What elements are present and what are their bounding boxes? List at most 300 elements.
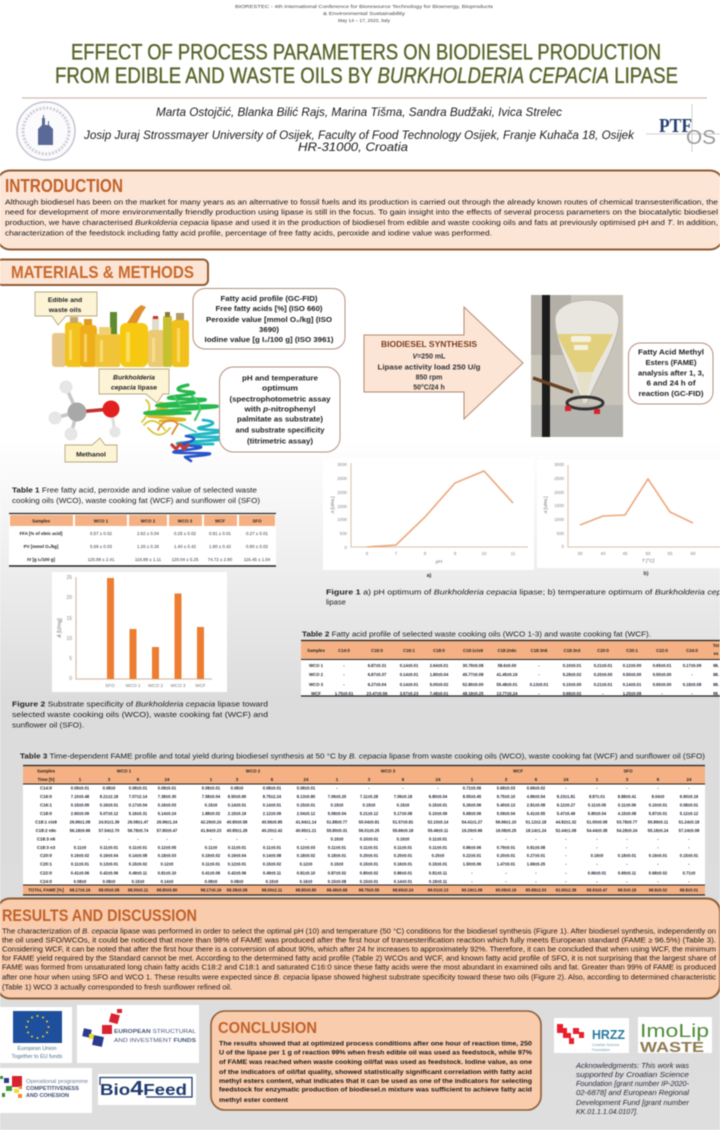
table 1: 120.04 ± 5.25 bbox=[172, 557, 199, 562]
table 3: 53.78±0.77 bbox=[617, 820, 638, 824]
text block: conclusion: methyl ester content bbox=[219, 1097, 289, 1104]
table 3: 0.15±0.01 bbox=[360, 879, 379, 884]
table 3: 0.69±0.11 bbox=[618, 870, 637, 876]
table 3: - bbox=[505, 836, 507, 842]
table 3: 0.68±0.02 bbox=[649, 870, 668, 876]
table 3: 41.84±0.23 bbox=[201, 828, 222, 833]
text block: results: (Table 1) WCO 3 actually corresponded to fresh sunflower refined oil. bbox=[2, 982, 232, 991]
table 2: 23.47±0.56 bbox=[367, 691, 388, 696]
table 3: 0.08±0.01 bbox=[680, 802, 699, 808]
table 2: - bbox=[343, 663, 345, 668]
table 1: SFO bbox=[252, 518, 262, 524]
heading: conclusion: CONCLUSION bbox=[218, 1020, 317, 1037]
table 3: 0.16±0.03 bbox=[158, 802, 177, 808]
table 2: C16:0 bbox=[371, 648, 383, 653]
table 2: 48.18±0.25 bbox=[463, 691, 484, 696]
table 2: 0.13±0.01 bbox=[530, 682, 549, 687]
box: pH and temperature assays: (spectrophotometric assay bbox=[230, 396, 331, 404]
table 3: 51.12±2.18 bbox=[526, 820, 547, 824]
icon: PTF OS logo: PTF bbox=[659, 115, 692, 137]
table 3: 5.08±0.04 bbox=[328, 811, 347, 816]
table 2: - bbox=[538, 691, 540, 696]
table 2: C18:3n3 bbox=[564, 648, 581, 653]
table 3: C18:2 n6c bbox=[36, 828, 57, 833]
table 3: WCO 1 bbox=[117, 768, 132, 774]
table 3: 2.04±0.12 bbox=[297, 811, 316, 816]
text block: results: after one hour when using SFO and WCO 1. These results were expected since B. cepacia lipase showed highest substrate specificity toward these two oils (Figure 2). Also, according to determined characteristic bbox=[2, 972, 716, 981]
table 2: Samples bbox=[307, 648, 325, 653]
chart: figure 1a pH optimum line: 1000 bbox=[337, 517, 348, 522]
table 1: WCO 1 bbox=[94, 518, 109, 524]
table 2: WCF bbox=[311, 691, 321, 696]
chart: figure 1a pH optimum line: A [U/mL] bbox=[330, 496, 335, 515]
table 3: 0.14±0.01 bbox=[263, 802, 282, 808]
table 3: - bbox=[657, 845, 659, 850]
box: pH and temperature assays: palmitate as substrate) bbox=[237, 416, 323, 424]
table 3: 0.08±0 bbox=[103, 786, 116, 790]
table 3: TOTAL FAME [%] bbox=[28, 888, 64, 892]
table 2: - bbox=[343, 672, 345, 677]
box: FAME analysis: analysis after 1, 3, bbox=[638, 370, 704, 378]
table 2: 41.45±0.19 bbox=[497, 672, 518, 677]
table 3: 0.19±0.02 bbox=[71, 853, 90, 858]
table 3: - bbox=[236, 836, 238, 842]
conference header bbox=[235, 4, 494, 23]
chart: figure 2 substrate specificity bars: 0 bbox=[69, 676, 72, 682]
table 3: 56.78±0.74 bbox=[128, 828, 149, 833]
table 3: 8.75±2.24 bbox=[263, 794, 282, 799]
text block: results: the oil used SFO/WCOs, it could be noticed that more than 98% of FAME was produced after the first hour of transesterification reaction which fully meets European standard (FAME ≥ 96.5%) (Table 3). bbox=[2, 935, 716, 944]
table 3: 55.18±0.24 bbox=[648, 828, 669, 833]
table 3: 98.8±0.01 bbox=[680, 888, 699, 892]
callout: methanol: Methanol bbox=[76, 452, 106, 458]
table 2: 6.87±0.37 bbox=[368, 672, 387, 677]
acknowledgments: Acknowledgments: This work was bbox=[575, 1061, 689, 1070]
table 3: 8.88±0.41 bbox=[618, 794, 637, 799]
text block: conclusion: The results showed that at optimized process conditions after one hour of reaction time, 250 bbox=[219, 1040, 532, 1048]
table 3: 1 bbox=[79, 777, 82, 782]
chart: figure 1b temperature optimum line: 55 bbox=[667, 551, 673, 556]
acknowledgments: Foundation [grant number IP-2020- bbox=[576, 1079, 690, 1088]
table 1: 116.88 ± 1.11 bbox=[135, 557, 162, 562]
logo: HRZZ bbox=[554, 1018, 629, 1053]
table 3: 0.14±0.08 bbox=[263, 853, 282, 858]
table 1: FFA [% of oleic acid] bbox=[20, 531, 63, 536]
table 2: C18:1cis9 bbox=[463, 648, 484, 653]
table 3: 7.07±2.14 bbox=[129, 794, 148, 799]
chart: figure 2 substrate specificity bars bbox=[52, 572, 227, 692]
chart: figure 2 substrate specificity bars: 15 bbox=[66, 616, 72, 622]
table 3: 98.80±0.80 bbox=[296, 888, 317, 892]
table 2: 7.48±0.01 bbox=[430, 691, 449, 696]
table 3: 5.41±0.55 bbox=[527, 811, 546, 816]
table 3: 98.00±2.11 bbox=[262, 888, 283, 892]
table 3: 0.15±0.01 bbox=[360, 862, 379, 866]
chart: figure 1b temperature optimum line: 2000 bbox=[554, 490, 565, 495]
logo: Operational programme competitiveness and cohesion: Operational programme bbox=[26, 1079, 88, 1085]
table 1: 74.72 ± 2.80 bbox=[208, 557, 233, 562]
table 3: 0.15±0 bbox=[266, 879, 279, 884]
text block: results: for FAME yield required by the Standard cannot be met. According to the determined fatty acid profile (Table 2) WCOs and WCF, and known fatty acid profile of SFO, it is not surprising that the largest share of bbox=[2, 953, 717, 962]
table 3: 0.86±0.06 bbox=[463, 845, 482, 850]
table 3: 1.88±0.02 bbox=[202, 811, 221, 816]
table 3: 0.11±0.01 bbox=[263, 845, 282, 850]
table 2: 13.77±0.24 bbox=[497, 691, 518, 696]
table 3: - bbox=[305, 836, 307, 842]
table 1: WCF bbox=[215, 518, 225, 524]
table 1 caption: Table 1 Free fatty acid, peroxide and iodine value of selected waste bbox=[12, 486, 257, 494]
chart: figure 1a pH optimum line: pH bbox=[435, 559, 443, 565]
table 3: 98.75±0.55 bbox=[359, 888, 380, 892]
table 2: 0.10±0.01 bbox=[563, 663, 582, 668]
table 3: 0.11±0.01 bbox=[360, 845, 379, 850]
table 3: 99.01±0.13 bbox=[428, 888, 449, 892]
acknowledgments: Development Fund [grant number bbox=[576, 1098, 690, 1107]
table 2: 30.79±0.08 bbox=[463, 663, 484, 668]
logo: ImoLip WASTE bbox=[638, 1017, 712, 1056]
table 2: 5.00±0.02 bbox=[430, 682, 449, 687]
text block: conclusion: methyl esters content, what indicates that it can be used as one of the indicators for selecting bbox=[219, 1078, 532, 1085]
table 2: C14:0 bbox=[338, 648, 350, 653]
table 3: - bbox=[596, 879, 598, 884]
table 2: 52.80±0.00 bbox=[463, 682, 484, 687]
table 3: 0.11±0.01 bbox=[328, 845, 347, 850]
table 3: 0.14±0.01 bbox=[394, 879, 413, 884]
table 3: 0.19±0.01 bbox=[649, 853, 668, 858]
box: feedstock analyses: 3690) bbox=[259, 327, 279, 334]
text block: conclusion: U of the lipase per 1 g of reaction 99% when fresh edible oil was used as feedstock, while 97% bbox=[219, 1050, 532, 1056]
conference header: BIORESTEC - 4th International Conference for Bioresource Technology for Bioenergy, Bioproducts bbox=[235, 4, 494, 9]
table 2: 0.10±0.00 bbox=[563, 682, 582, 687]
table 3: 98.17±0.19 bbox=[201, 888, 222, 892]
table 2: C18:3n6 bbox=[531, 648, 548, 653]
table 2: 0.21±0.01 bbox=[594, 663, 613, 668]
table 1: WCO 2 bbox=[141, 518, 156, 524]
table 3: 24 bbox=[564, 777, 569, 782]
table 2: - bbox=[538, 672, 540, 677]
table 2: 2.64±0.01 bbox=[430, 663, 449, 668]
table 3: - bbox=[535, 870, 537, 876]
box: feedstock analyses bbox=[193, 288, 345, 349]
chart: figure 1a pH optimum line: 11 bbox=[511, 551, 516, 556]
table 3: Samples bbox=[37, 768, 56, 774]
table 3: 0.87±0.02 bbox=[328, 870, 347, 876]
table 3: - bbox=[437, 786, 439, 790]
heading: results and discussion: RESULTS AND DISCUSSION bbox=[2, 906, 197, 925]
chart: figure 1a pH optimum line: 9 bbox=[454, 551, 457, 556]
table 3: 8.55±0.45 bbox=[463, 794, 482, 799]
table 3: 0.15±0.08 bbox=[328, 879, 347, 884]
table 3: - bbox=[626, 845, 628, 850]
table 3: 54.44±0.38 bbox=[587, 828, 608, 833]
chart: figure 2 substrate specificity bars: WCO 2 bbox=[148, 683, 163, 688]
table 3: 0.08±0.01 bbox=[297, 786, 316, 790]
table 3: 5.21±0.12 bbox=[360, 811, 379, 816]
table 3: 0.15±0.02 bbox=[129, 862, 148, 866]
table 3: 0.19±0 bbox=[591, 853, 604, 858]
chart: figure 1a pH optimum line: 7 bbox=[395, 551, 398, 556]
chart: figure 1b temperature optimum line: A [U/mL] bbox=[543, 496, 548, 515]
panel: results and discussion bbox=[0, 898, 720, 998]
bars bbox=[107, 578, 204, 679]
table 3: 24 bbox=[165, 777, 170, 782]
table 3: 5.10±0.09 bbox=[429, 811, 448, 816]
table 2: WCO 3 bbox=[309, 682, 324, 687]
table 3: 7.10±0.48 bbox=[71, 794, 90, 799]
table 3: - bbox=[596, 862, 598, 866]
table 3: 0.20±0.01 bbox=[360, 853, 379, 858]
table 2: 0.60±0.00 bbox=[653, 682, 672, 687]
table 3: 98.00±0.08 bbox=[99, 888, 120, 892]
table 3: 0.11±0.06 bbox=[618, 802, 637, 808]
table 3: 0.11±0.01 bbox=[71, 862, 90, 866]
table 3: 0.15±0.01 bbox=[680, 853, 699, 858]
table 3: - bbox=[688, 879, 690, 884]
authors: Marta Ostojčić, Blanka Bilić Rajs, Marina Tišma, Sandra Budžaki, Ivica Strelec bbox=[156, 105, 562, 119]
table 3: WCO 3 bbox=[381, 768, 396, 774]
table 2: 1.75±0.51 bbox=[335, 691, 354, 696]
table 3: - bbox=[535, 879, 537, 884]
table 3: 0.16±0 bbox=[300, 879, 313, 884]
table 3: 54.41±1.27 bbox=[462, 820, 483, 824]
table 2: C16:1 bbox=[403, 648, 415, 653]
chart: figure 1a pH optimum line: 10 bbox=[481, 551, 487, 556]
table 3: 0.20±0 bbox=[432, 853, 445, 858]
table 2: - bbox=[538, 663, 540, 668]
table 3: 5.47±0.49 bbox=[557, 811, 576, 816]
table 3: - bbox=[471, 879, 473, 884]
chart: figure 1b temperature optimum line: 1000 bbox=[554, 517, 565, 522]
table 2: 98. bbox=[713, 672, 719, 677]
table 2: 98. bbox=[713, 691, 719, 696]
table 3: 0.41±0.06 bbox=[71, 870, 90, 876]
table 3: 8.50±0.90 bbox=[228, 794, 247, 799]
figure 1 caption: lipase bbox=[326, 598, 346, 606]
table 3: 0.79±0.01 bbox=[497, 845, 516, 850]
table 3: - bbox=[108, 836, 110, 842]
box: feedstock analyses: Peroxide value [mmol O₂/kg] (ISO bbox=[206, 317, 333, 324]
table 3: 85.88±2.03 bbox=[526, 888, 547, 892]
table 2: 0.18±0.08 bbox=[683, 682, 702, 687]
table 3: C20:1 bbox=[40, 862, 53, 866]
table 3: 0.12±0.05 bbox=[158, 845, 177, 850]
box: pH and temperature assays: (titrimetric assay) bbox=[247, 438, 313, 446]
title: FROM EDIBLE AND WASTE OILS BY BURKHOLDERIA CEPACIA LIPASE bbox=[55, 63, 678, 88]
table 3: 24.91±1.39 bbox=[99, 820, 120, 824]
table 3: 98.8±0.02 bbox=[649, 888, 668, 892]
table 2: 0.20±0.00 bbox=[594, 672, 613, 677]
chart: figure 1b temperature optimum line: 2500 bbox=[554, 476, 565, 481]
table 3: 98.38±0.08 bbox=[227, 888, 248, 892]
table 3: 51.24±0.18 bbox=[679, 820, 700, 824]
table 3: 51.88±0.77 bbox=[327, 820, 348, 824]
table 3: 0.14±0 bbox=[161, 879, 174, 884]
table 3: C18:1 cis9 bbox=[35, 820, 57, 824]
table 3: 0.19±0.04 bbox=[228, 853, 247, 858]
table 3: 0.66±0.01 bbox=[588, 870, 607, 876]
table 3: 5.17±0.08 bbox=[394, 811, 413, 816]
table 3: 0.49±0.11 bbox=[263, 870, 282, 876]
table 3: 0.08±0.01 bbox=[263, 786, 282, 790]
table 3: 98.00±0.11 bbox=[128, 888, 149, 892]
table 1: 0.57 ± 0.02 bbox=[90, 531, 113, 536]
table 3: - bbox=[657, 879, 659, 884]
table 3: 1.47±0.01 bbox=[497, 862, 516, 866]
logo: Operational programme competitiveness and cohesion: COMPETITIVENESS bbox=[26, 1086, 80, 1092]
table 2: C20:1 bbox=[626, 648, 638, 653]
table 3: 50.04±0.81 bbox=[359, 820, 380, 824]
table 3: 5.07±0.12 bbox=[100, 811, 119, 816]
image: oil bottles bbox=[52, 305, 189, 367]
table 3: 1 bbox=[471, 777, 474, 782]
table 3: 56.66±1.10 bbox=[496, 820, 517, 824]
table 3: 0.13±0.01 bbox=[100, 862, 119, 866]
table 2: 6.27±0.04 bbox=[368, 682, 387, 687]
table 3: - bbox=[565, 862, 567, 866]
panel: conclusion bbox=[211, 1011, 541, 1110]
table 3: 5.09±0.04 bbox=[497, 811, 516, 816]
text block: conclusion: feedstock for enzymatic production of biodiesel.n mixture was sufficient to achieve fatty acid bbox=[219, 1086, 532, 1094]
table 3: 0.15±0 bbox=[331, 862, 344, 866]
text block: introduction: need for development of more environmentally friendly production using lipase is still in the focus. To gain insight into the effects of several process parameters on the biocatalytic biodiesel bbox=[5, 208, 718, 216]
table 3: - bbox=[505, 879, 507, 884]
table 3: 0.18±0.02 bbox=[297, 853, 316, 858]
table 3: 0.12±0.03 bbox=[297, 845, 316, 850]
chart: figure 1b temperature optimum line: 3000 bbox=[554, 462, 565, 467]
table 3 bbox=[23, 765, 705, 896]
table 3: 52.44±1.08 bbox=[556, 828, 577, 833]
table 2 bbox=[301, 640, 720, 696]
chart: figure 1a pH optimum line: 2500 bbox=[337, 476, 348, 481]
acknowledgments: KK.01.1.1.04.0107]. bbox=[576, 1107, 638, 1116]
table 3: 51.57±0.81 bbox=[393, 820, 414, 824]
table 2: - bbox=[602, 691, 604, 696]
table 3: 0.08±0 bbox=[231, 786, 244, 790]
table 2: 0.50±0.00 bbox=[653, 672, 672, 677]
table 1: IV [g I₂/100 g] bbox=[27, 557, 55, 562]
table 3: - bbox=[657, 786, 659, 790]
table 3: 0.81±0.08 bbox=[527, 845, 546, 850]
table 3: 0.27±0.01 bbox=[527, 853, 546, 858]
table 3: 50.89±0.11 bbox=[648, 820, 669, 824]
logo: European Structural and Investment Funds: EUROPEAN STRUCTURAL bbox=[114, 1029, 197, 1035]
table 3: 6.90±0.19 bbox=[680, 794, 699, 799]
arrow: biodiesel synthesis bbox=[364, 307, 523, 419]
table 3: - bbox=[336, 786, 338, 790]
table 3: 0.15±0 bbox=[331, 802, 344, 808]
table 3: 0.10±0.01 bbox=[360, 836, 379, 842]
table 3: 55.46±0.11 bbox=[428, 828, 449, 833]
table 3: - bbox=[688, 845, 690, 850]
table 3: 6.80±0.04 bbox=[429, 794, 448, 799]
table 1: WCO 3 bbox=[178, 518, 193, 524]
table 3: 0.69±0.02 bbox=[527, 786, 546, 790]
table 3: - bbox=[626, 862, 628, 866]
table 3: 8.23±1.81 bbox=[557, 794, 576, 799]
chart: figure 2 substrate specificity bars: WCO 1 bbox=[125, 683, 141, 688]
table 3: 0.49±0.11 bbox=[129, 870, 148, 876]
logo: HRZZ: Croatian Science bbox=[592, 1043, 619, 1047]
chart: figure 1a pH optimum line: 2000 bbox=[337, 490, 348, 495]
table 3: 7.06±0.18 bbox=[394, 794, 413, 799]
callout: Burkholderia cepacia lipase: Burkholderia bbox=[113, 374, 155, 382]
table 2: - bbox=[343, 682, 345, 687]
table 1: PV [mmol O₂/kg] bbox=[24, 544, 59, 549]
table 3: 92.65±2.38 bbox=[556, 888, 577, 892]
logo: Operational programme competitiveness and cohesion: AND COHESION bbox=[26, 1093, 69, 1099]
chart: figure 2 substrate specificity bars: 20 bbox=[66, 595, 72, 601]
logo: ImoLip WASTE: WASTE bbox=[640, 1039, 704, 1056]
table 3: 55.66±0.18 bbox=[393, 828, 414, 833]
table 3: 0.86±0.01 bbox=[394, 870, 413, 876]
table 3: - bbox=[271, 836, 273, 842]
table 1: 0.27 ± 0.01 bbox=[246, 531, 269, 536]
chart: figure 1a pH optimum line: 500 bbox=[340, 531, 348, 536]
table 3: - bbox=[471, 870, 473, 876]
chart: figure 1b temperature optimum line: 50 bbox=[645, 551, 651, 556]
table 3: 5.68±0.06 bbox=[463, 811, 482, 816]
table 3: 0.11±0.01 bbox=[228, 845, 247, 850]
table 3: 0.09±0.01 bbox=[71, 786, 90, 790]
table 3: 5.26±0.06 bbox=[463, 802, 482, 808]
table 3: 0.08±0.01 bbox=[202, 786, 221, 790]
table 3: 90.08±0.19 bbox=[496, 888, 517, 892]
table 3: SFO bbox=[623, 768, 633, 774]
table 3: 6 bbox=[402, 777, 405, 782]
table 3: C24:0 bbox=[40, 879, 53, 884]
table 3: 0.42±0.06 bbox=[228, 870, 247, 876]
table 3: 0.81±0.10 bbox=[297, 870, 316, 876]
arrow: biodiesel synthesis: 850 rpm bbox=[416, 374, 442, 382]
table 3: 42.29±0.24 bbox=[201, 820, 222, 824]
table 3: 40.95±1.21 bbox=[296, 828, 317, 833]
arrow: biodiesel synthesis: BIODIESEL SYNTHESIS bbox=[381, 339, 477, 349]
chart: figure 1b temperature optimum line: 500 bbox=[557, 531, 565, 536]
table 3: 0.08±0.01 bbox=[158, 786, 177, 790]
table 3: 0.11±0.01 bbox=[394, 845, 413, 850]
table 3: 57.54±2.70 bbox=[99, 828, 120, 833]
box: FAME analysis: Esters (FAME) bbox=[646, 360, 696, 367]
acknowledgments: 02-6878] and European Regional bbox=[576, 1088, 689, 1097]
table 3: - bbox=[626, 786, 628, 790]
acknowledgments bbox=[575, 1061, 690, 1116]
table 3: - bbox=[368, 786, 370, 790]
table 3: - bbox=[596, 845, 598, 850]
table 2: 1.80±0.04 bbox=[430, 672, 449, 677]
table 1: 116.45 ± 1.04 bbox=[244, 557, 271, 562]
arrow: biodiesel synthesis: V=250 mL bbox=[413, 354, 446, 360]
icon: methanol molecule bbox=[48, 380, 120, 440]
table 2: 0.65±0.01 bbox=[653, 663, 672, 668]
table 3: 0.11±0.01 bbox=[429, 836, 448, 842]
table 3: 6 bbox=[137, 777, 140, 782]
table 2: 58.6±0.00 bbox=[498, 663, 517, 668]
table 3: 0.15±0.09 bbox=[71, 802, 90, 808]
table 2: 0.21±0.01 bbox=[594, 682, 613, 687]
affiliation bbox=[83, 128, 635, 154]
table 3: 1 bbox=[210, 777, 213, 782]
table 3: - bbox=[166, 836, 168, 842]
table 3: WCO 2 bbox=[246, 768, 261, 774]
table 3: 0.15±0 bbox=[397, 802, 410, 808]
table 3: 56.18±0.66 bbox=[70, 828, 91, 833]
chart: figure 1b temperature optimum line: 60 bbox=[690, 551, 696, 556]
table 3: 0.12±0.01 bbox=[228, 862, 247, 866]
table 3: 5.87±0.01 bbox=[649, 811, 668, 816]
table 3: 3 bbox=[236, 777, 239, 782]
table 3: 7.38±0.30 bbox=[158, 794, 177, 799]
table 3: 0.10±0 bbox=[331, 836, 344, 842]
